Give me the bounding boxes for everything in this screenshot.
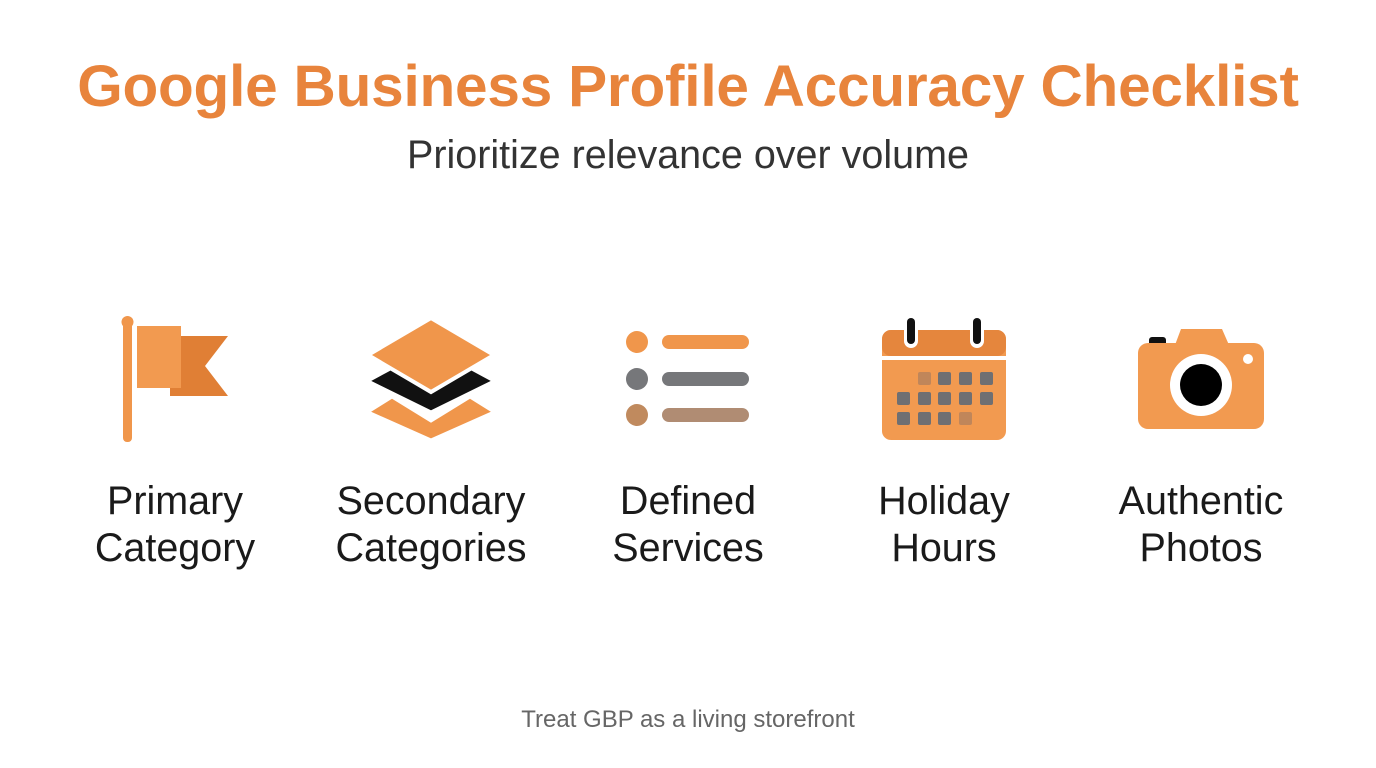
- label: secondary categories: Secondary: [337, 479, 525, 523]
- label: secondary categories: [335, 479, 527, 570]
- label: authentic photos: Authentic: [1119, 479, 1283, 523]
- label: primary category: Category: [95, 526, 255, 570]
- label: primary category: [95, 479, 255, 570]
- icon: layers: [368, 318, 494, 440]
- icon: camera: [1138, 329, 1264, 429]
- footer: Treat GBP as a living storefront: [521, 706, 855, 733]
- label: holiday hours: Hours: [891, 526, 997, 570]
- label: authentic photos: [1118, 479, 1283, 570]
- label: holiday hours: Holiday: [878, 479, 1010, 523]
- label: secondary categories: Categories: [335, 526, 527, 570]
- title: Google Business Profile Accuracy Checklist: [77, 54, 1299, 119]
- label: defined services: [612, 479, 764, 570]
- icon: flag: [122, 316, 228, 442]
- label: authentic photos: Photos: [1140, 526, 1262, 570]
- label: holiday hours: [878, 479, 1010, 570]
- icon: calendar: [882, 316, 1006, 440]
- label: defined services: Defined: [620, 479, 756, 523]
- subtitle: Prioritize relevance over volume: [407, 133, 969, 177]
- icon: list: [626, 331, 749, 426]
- label: defined services: Services: [612, 526, 764, 570]
- label: primary category: Primary: [107, 479, 243, 523]
